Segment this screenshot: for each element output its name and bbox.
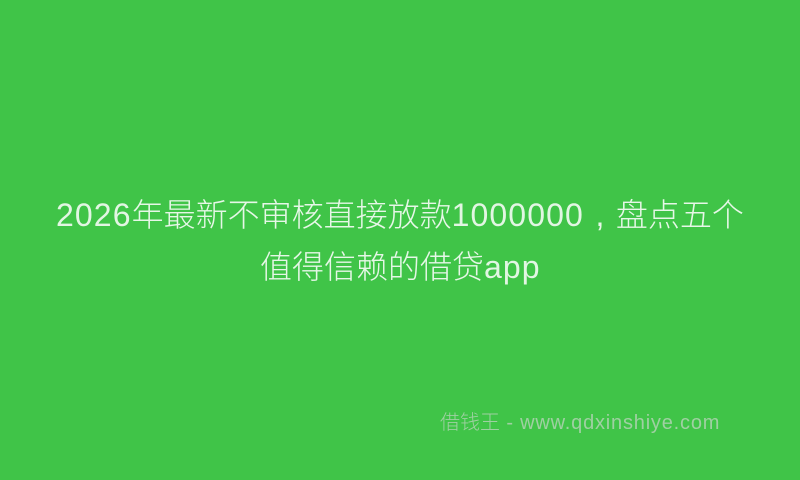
watermark: 借钱王 - www.qdxinshiye.com — [440, 406, 720, 435]
title line 1: , — [595, 197, 604, 233]
title line 2: 值得信赖的借贷app — [260, 242, 541, 288]
title line 1: 2026年最新不审核直接放款1000000 盘点五个 — [56, 190, 744, 236]
